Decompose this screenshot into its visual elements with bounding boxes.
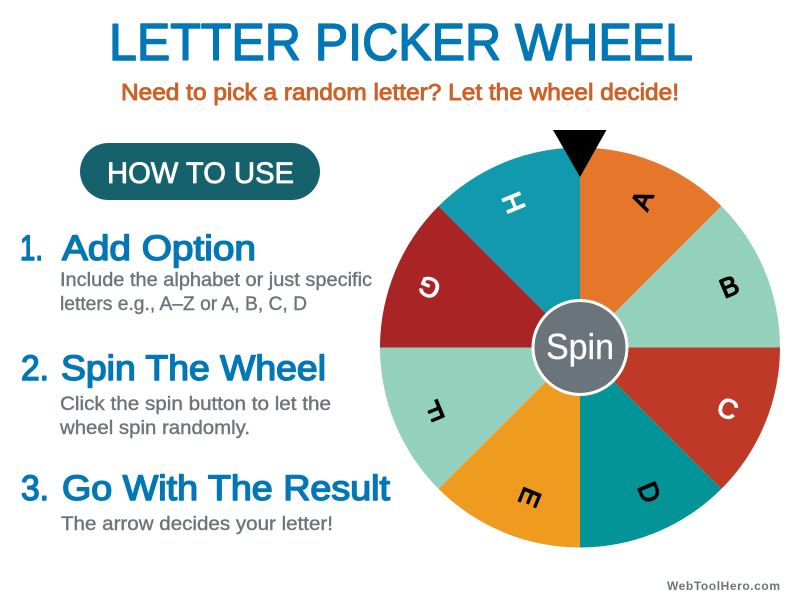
step 3: The arrow decides your letter! xyxy=(61,514,333,535)
step 3: 3. xyxy=(21,469,49,508)
step 2: wheel spin randomly. xyxy=(59,418,250,439)
slice B xyxy=(580,206,780,348)
how to use badge: HOW TO USE xyxy=(107,157,294,190)
spin button: Spin xyxy=(546,326,614,367)
step 2: Click the spin button to let the xyxy=(60,394,331,415)
step 1: Add Option xyxy=(62,229,256,268)
slice D xyxy=(580,348,721,548)
step 3 xyxy=(21,469,390,535)
website credit: WebToolHero.com xyxy=(667,579,780,593)
slice G: G xyxy=(414,269,445,305)
slice E xyxy=(439,348,580,548)
slice H: H xyxy=(496,188,532,217)
subtitle: Need to pick a random letter? Let the wheel decide! xyxy=(121,79,679,105)
letter wheel xyxy=(380,148,780,548)
spin button xyxy=(533,300,627,394)
slice A xyxy=(580,148,721,348)
step 1: letters e.g., A–Z or A, B, C, D xyxy=(60,294,307,315)
slice A: A xyxy=(625,186,660,214)
slice F xyxy=(380,348,580,489)
step 2 xyxy=(21,349,331,439)
slice B: B xyxy=(715,270,743,304)
step 2: Spin The Wheel xyxy=(61,349,326,388)
slice E: E xyxy=(512,483,547,511)
step 2: 2. xyxy=(21,349,49,388)
slice D: D xyxy=(631,478,667,507)
pointer arrow xyxy=(553,130,606,177)
slice F: F xyxy=(422,393,448,427)
slice C: C xyxy=(713,391,742,427)
title: LETTER PICKER WHEEL xyxy=(109,14,693,72)
step 1: 1. xyxy=(20,229,43,268)
step 3: Go With The Result xyxy=(62,469,390,508)
step 1 xyxy=(20,229,372,315)
slice H xyxy=(439,148,580,348)
slice G xyxy=(380,206,580,348)
slice C xyxy=(580,348,780,489)
step 1: Include the alphabet or just specific xyxy=(60,270,372,291)
how to use badge xyxy=(80,143,320,200)
